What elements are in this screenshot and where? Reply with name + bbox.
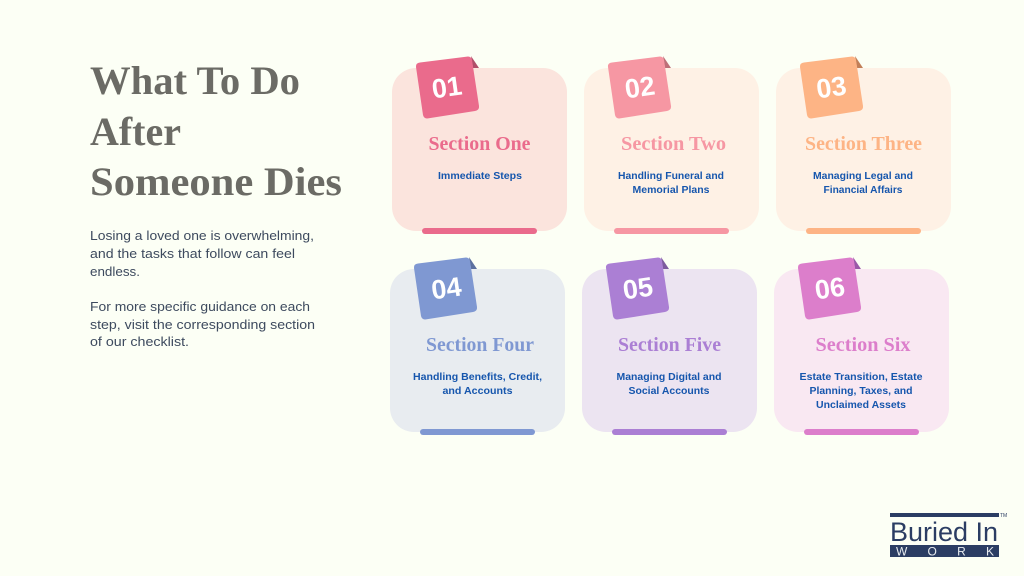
title: After [90,109,181,154]
logo: Buried In Work: Buried In [890,517,998,547]
logo: Buried In Work [890,513,1007,558]
description section five [616,371,722,397]
description section three: Managing Legal and [813,170,913,182]
number tag 03 [800,56,863,118]
panel: section six [774,257,949,435]
accent bar six [804,429,919,435]
logo: Buried In Work: WORK [896,544,994,558]
intro text block: endless. [90,264,140,279]
title: What To Do [90,58,300,103]
panel: section four [390,257,565,435]
description section six: Planning, Taxes, and [810,385,912,397]
description section three: Financial Affairs [824,184,903,196]
heading section two: Section Two [621,133,726,155]
number tag 06 [798,257,861,319]
title [90,58,342,204]
panel: section five [582,257,757,435]
number tag 02: 02 [623,71,657,104]
intro text block: step, visit the corresponding section [90,317,315,332]
description section five: Managing Digital and [616,371,722,383]
description section two: Memorial Plans [632,184,710,196]
heading section four: Section Four [426,334,534,356]
logo: Buried In Work: TM [1000,513,1007,519]
accent bar five [612,429,727,435]
number tag 04 [414,257,477,319]
intro text block: and the tasks that follow can feel [90,246,295,261]
heading section six: Section Six [816,334,910,356]
panel: section two [584,56,759,234]
intro text block [90,228,315,349]
number tag 01 [416,56,479,118]
description section six: Unclaimed Assets [816,399,906,411]
title: Someone Dies [90,159,342,204]
number tag 05: 05 [621,272,655,305]
description section three [813,170,913,196]
intro text block: of our checklist. [90,334,189,349]
accent bar one [422,228,537,234]
description section six [800,371,923,411]
heading section three: Section Three [805,133,922,155]
accent bar four [420,429,535,435]
intro text block: Losing a loved one is overwhelming, [90,228,314,243]
description section four: and Accounts [442,385,513,397]
accent bar two [614,228,729,234]
heading section one: Section One [428,133,531,155]
description section two [618,170,724,196]
number tag 04: 04 [429,272,463,305]
description section two: Handling Funeral and [618,170,724,182]
number tag 02 [608,56,671,118]
panel: section three [776,56,951,234]
accent bar three [806,228,921,234]
number tag 01: 01 [430,71,464,104]
description section four: Handling Benefits, Credit, [413,371,542,383]
number tag 06: 06 [813,272,847,305]
intro text block: For more specific guidance on each [90,299,310,314]
number tag 05 [606,257,669,319]
description section five: Social Accounts [628,385,710,397]
description section six: Estate Transition, Estate [800,371,923,383]
number tag 03: 03 [814,71,848,104]
description section one: Immediate Steps [438,170,522,182]
description section four [413,371,542,397]
panel: section one [392,56,567,234]
heading section five: Section Five [618,334,721,356]
